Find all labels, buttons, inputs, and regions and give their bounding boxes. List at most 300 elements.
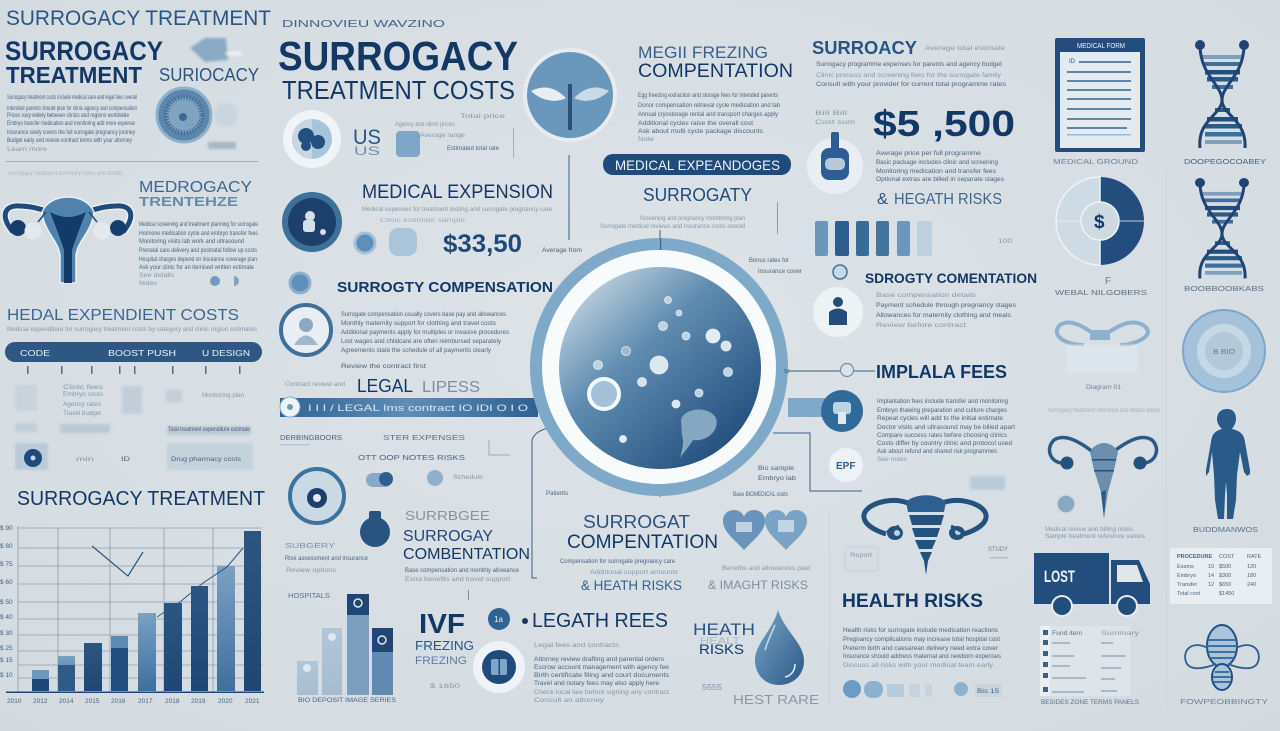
text block: medrogacy paragraph: Prenatal care delivery and postnatal follow up costs <box>139 248 257 254</box>
axis labels: cost values: $ 40 <box>0 614 13 621</box>
axis labels: years <box>7 698 260 705</box>
heading: surrogacy treatment chart title: SURROGACY TREATMENT <box>17 488 265 510</box>
icon: uterus anatomy <box>5 197 131 283</box>
icon: numbered ring on timeline <box>840 364 854 376</box>
text block: health risks paragraph: Preterm birth and caesarean delivery need extra cover <box>843 646 998 652</box>
text block: surrogaty caption: Surrogate medical reviews and insurance costs overall <box>600 224 745 230</box>
table: cost breakdown: Clinic fees <box>63 385 103 391</box>
table: white data card: 10 <box>1208 564 1214 570</box>
heading: legal fees <box>285 376 480 396</box>
table: cost breakdown <box>15 385 253 470</box>
text: DNA flower caption: FOWPEOBBINGTY <box>1180 697 1268 706</box>
table: cost breakdown: Drug pharmacy costs <box>171 457 241 463</box>
table: cost breakdown: Embryo costs <box>63 392 103 398</box>
text block: freezing paragraph: Egg freezing extraction and storage fees for intended parents <box>638 93 778 99</box>
text block: implant fees paragraph: Implantation fees include transfer and monitoring <box>877 399 1008 405</box>
text: callouts around disc: Embryo lab <box>758 476 797 482</box>
text block: US notes <box>395 114 506 152</box>
text: best rate: HEST RARE <box>733 692 819 707</box>
text block: freezing paragraph: Note <box>638 137 655 143</box>
text block: intro paragraph: Budget early and review contract terms with your attorney <box>7 138 132 144</box>
text: small note after toggles: Schedule <box>453 475 484 481</box>
heading: surrogacy compensation right: SDROGTY COMENTATION <box>865 270 1037 286</box>
text block: intro paragraph <box>7 95 137 153</box>
text: uterus caption: Sample treatment reference values <box>1045 534 1145 540</box>
heading: surrogacy compensation lower <box>403 508 530 563</box>
icon: egg cell <box>157 88 238 149</box>
label pill: cost categories: BOOST PUSH <box>108 349 176 358</box>
icon: freezing circle <box>473 641 525 693</box>
heading: surrogacy compensation lower: SURRBGEE <box>405 508 490 523</box>
heading: implant fees: IMPLALA FEES <box>876 362 1007 382</box>
text: callouts around disc: Patients <box>546 491 568 497</box>
text block: medical expense caption: Medical expenses for treatment testing and surrogate pregnancy care <box>362 207 553 213</box>
table: white data card: 12 <box>1208 582 1214 588</box>
panel: lower centre compensation <box>560 510 819 707</box>
heading: legal fees: LIPESS <box>422 379 480 396</box>
chart: pie with dollar <box>1056 177 1144 265</box>
heading: megi freezing: MEGII FREZING <box>638 43 768 62</box>
text: pale uterus caption: Diagram 01 <box>1086 384 1121 391</box>
text block: medical expense caption: Clinic estimate sample <box>380 218 466 224</box>
heading: surrogaty: SURROGATY <box>643 185 752 205</box>
icon: small blue capsule <box>210 276 239 286</box>
axis labels: years: 2012 <box>33 698 48 705</box>
table: white data card: $1450 <box>1219 591 1234 597</box>
text block: US notes: Average range <box>420 133 466 139</box>
text block: compensation paragraph: Review the contract first <box>341 364 426 370</box>
text block: intro paragraph: Prices vary widely between clinics and regions worldwide <box>7 113 130 119</box>
table: cost breakdown: Agency rates <box>63 402 101 408</box>
text block: compensation paragraph: Surrogate compensation usually covers base pay and allowances <box>341 312 506 318</box>
text block: US notes: Total price <box>460 114 506 120</box>
text block: medical expense caption <box>362 207 553 224</box>
text: faded US label: US <box>354 144 380 158</box>
panel: centre title and costs <box>278 19 670 704</box>
text block: legal fees paragraph: Escrow account management with agency fee <box>534 665 670 671</box>
text block: legal fees paragraph: Birth certificate filing and court documents <box>534 673 669 679</box>
text: small note beside price <box>815 111 855 126</box>
text block: legal fees paragraph: Attorney review drafting and parental orders <box>534 657 664 663</box>
title: surrogacy: SURROGACY <box>278 33 518 79</box>
large cell <box>589 379 619 409</box>
panel: top centre-right <box>600 38 1037 705</box>
axis labels: cost values: $ 60 <box>0 579 13 586</box>
axis labels: years: 2021 <box>245 698 260 705</box>
axis labels: cost values: $ 90 <box>0 525 13 532</box>
heading: health risks: & <box>877 191 888 208</box>
icon: blurred blue badge <box>190 38 242 62</box>
text block: implant fees paragraph: Ask about refund and shared risk programmes <box>877 449 997 455</box>
heading: surrogacy compensation lower: SURROGAY <box>403 528 493 545</box>
text: small IVF note: $ 1650 <box>430 684 461 690</box>
text block: intro paragraph: Surrogacy treatment costs include medical care and legal fees overall <box>7 95 137 101</box>
text block: implant fees paragraph: Costs differ by country clinic and protocol used <box>877 441 1012 447</box>
heading: health risks centre: & HEATH RISKS <box>581 577 682 593</box>
axis labels: cost values: $ 15 <box>0 657 13 664</box>
heading: treatment bold: TREATMENT <box>6 62 142 88</box>
timeline bar: legal <box>280 397 538 417</box>
table: white data card: PROCEDURE <box>1177 554 1212 560</box>
icon: uterus simplified <box>864 495 986 575</box>
text block: implant fees paragraph <box>877 399 1015 463</box>
icon: dark medical circle <box>282 192 342 252</box>
title: treatment costs: TREATMENT COSTS <box>282 75 515 105</box>
text block: freezing paragraph <box>638 93 781 143</box>
icon: flask <box>360 511 390 547</box>
axis labels: cost values: $ 25 <box>0 645 13 652</box>
text block: compensation right <box>876 293 1016 329</box>
icon: water drop <box>755 610 804 685</box>
icon: pale device <box>389 228 417 256</box>
text block: medrogacy paragraph: Hormone medication cycle and embryo transfer fees <box>139 231 258 237</box>
text block: compensation lines: Additional support amounts <box>590 570 678 576</box>
chart: pie with dollar: $ <box>1094 212 1105 233</box>
heading: surrogacy compensation lower: COMBENTATION <box>403 546 530 563</box>
heading: medical expense: MEDICAL EXPENSION <box>362 182 553 203</box>
icon: implant head circle <box>821 390 863 432</box>
text block: surroacy lines: Clinic process and screening fees for the surrogate family <box>816 73 1001 79</box>
text block: implant fees paragraph: Embryo thawing preparation and culture charges <box>877 408 1007 414</box>
table: white data card: 180 <box>1247 573 1256 579</box>
text block: compensation lines: Compensation for surrogate pregnancy care <box>560 559 676 565</box>
number: medical cost: $33,50 <box>443 230 522 258</box>
text: long faint line: Surrogacy treatment reference and details below <box>1048 408 1161 414</box>
text block: price paragraph <box>876 151 1004 183</box>
icon: DNA helix lower <box>1195 178 1249 278</box>
heading: health risks stacked: RISKS <box>699 641 744 657</box>
text block: intro paragraph: Embryo transfer medication and monitoring add more expense <box>7 121 136 127</box>
text: IVF heading: IVF <box>419 608 465 639</box>
text block: health risks paragraph <box>843 628 1001 669</box>
icon: pale ring <box>1183 310 1265 392</box>
text block: health risks paragraph: Pregnancy complications may increase total hospital cost <box>843 637 1000 643</box>
icon: pale block <box>970 476 1005 490</box>
text block: implant fees paragraph: Compare success rates before choosing clinics <box>877 433 1007 439</box>
heading: compensation: COMPENTATION <box>638 61 793 82</box>
text: kicker above title: DINNOVIEU WAVZINO <box>282 19 445 30</box>
subheading: suriocacy: SURIOCACY <box>159 65 259 85</box>
text block: price paragraph: Optional extras are billed in separate stages <box>876 177 1004 183</box>
icon: person circle <box>813 287 863 337</box>
heading: legal fees: Contract review and <box>285 382 345 388</box>
central illustration: petri dish with cells: $0 <box>784 369 790 375</box>
table: cost breakdown: Total treatment expenditure estimate <box>168 427 251 433</box>
heading: surroacy: SURROACY <box>812 38 917 58</box>
text block: medrogacy paragraph: Medical screening and treatment planning for surrogate <box>139 222 259 228</box>
text: small note beside price: Bill Bill <box>815 111 847 117</box>
icon: pale note box: Report <box>850 553 872 559</box>
table: white data card: Transfer <box>1177 582 1197 588</box>
label pill: cost categories <box>5 342 262 362</box>
small bar chart: IVF stages <box>297 594 396 704</box>
text block: compensation right: Payment schedule through pregnancy stages <box>876 303 1016 309</box>
icon: DNA flower <box>1185 625 1259 690</box>
text: caption under costs heading: Medical expenditure for surrogacy treatment costs by category and clinic region estimates <box>7 327 257 333</box>
icon: two hearts <box>723 510 807 550</box>
text block: compensation lower lines: Extra benefits and travel support <box>405 577 510 583</box>
text block: surrogaty caption <box>600 202 778 234</box>
text block: surrogaty caption: Screening and pregnancy monitoring plan <box>640 216 745 222</box>
table: white data card: COST <box>1219 554 1235 560</box>
icon: medical document: MEDICAL FORM <box>1077 43 1125 50</box>
heading: surrogacy bold: SURROGACY <box>5 36 163 66</box>
text block: left-lower notes <box>285 543 369 600</box>
connector bar: to implant fees <box>788 398 828 417</box>
axis labels: years: 2017 <box>138 698 153 705</box>
text block: surroacy lines: Average total estimate <box>925 46 1006 52</box>
icon: pale note box <box>845 547 878 571</box>
text block: compensation right: Review before contract <box>876 323 966 329</box>
text block: freezing paragraph: Additional cycles raise the overall cost <box>638 121 753 127</box>
heading: health risks stacked <box>693 620 755 657</box>
text block: compensation right: Base compensation details <box>876 293 976 299</box>
text block: price paragraph: Basic package includes clinic and screening <box>876 160 998 166</box>
axis labels: cost values: $ 30 <box>0 630 13 637</box>
heading: medical expenditure costs: HEDAL EXPENDIENT COSTS <box>7 307 239 324</box>
axis labels: cost values: $ 80 <box>0 543 13 550</box>
text block: left-lower notes: Review options <box>286 568 336 574</box>
small bar chart: IVF stages: BIO DEPOSIT IMAGE SERIES <box>298 698 396 704</box>
icon: uterus right column <box>1049 438 1157 518</box>
axis labels: cost values: $ 10 <box>0 672 13 679</box>
icon: legal target ring <box>290 469 344 523</box>
heading: compensation centre: COMPENTATION <box>567 532 718 553</box>
text: small note beside price: Cost sum <box>815 120 855 126</box>
icon: numbered badge: 1a <box>494 615 503 624</box>
axis labels: years: 2015 <box>85 698 100 705</box>
text: silhouette caption: BUDDMANWOS <box>1193 525 1258 534</box>
cells <box>594 296 732 442</box>
text block: legal labels: OTT OOP NOTES RISKS <box>358 455 465 462</box>
label pill: cost categories: CODE <box>20 349 50 358</box>
text block: legal labels: STER EXPENSES <box>383 435 465 442</box>
text block: health risks paragraph: Discuss all risks with your medical team early <box>843 663 993 669</box>
text: uterus caption: Medical review and billing notes <box>1045 527 1133 533</box>
text block: compensation paragraph: Additional payments apply for multiples or invasive procedures <box>341 330 509 336</box>
icon: compensation mini ring <box>833 265 847 279</box>
text block: legal labels <box>280 435 510 462</box>
list: checklist: Fund item <box>1052 631 1082 637</box>
text block: medrogacy paragraph: Hospital charges depend on insurance coverage plan <box>139 257 257 263</box>
table: white data card: $300 <box>1219 573 1231 579</box>
axis labels: cost values: $ 50 <box>0 599 13 606</box>
text: uterus caption <box>1045 527 1145 540</box>
axis labels: years: 2018 <box>165 698 180 705</box>
text: pie caption: F <box>1105 276 1111 287</box>
icon: pale ring: B BIO <box>1213 349 1236 356</box>
text block: legal fees paragraph: Travel and notary fees may also apply here <box>534 681 660 687</box>
heading: health risks faded: & IMAGHT RISKS <box>708 578 808 592</box>
text: note at right of uterus: STUDY <box>988 547 1008 553</box>
text block: compensation lines: Benefits and allowances paid <box>722 566 810 572</box>
text block: medrogacy paragraph <box>139 222 259 287</box>
table: white data card: 240 <box>1247 582 1256 588</box>
table: white data card: Embryo <box>1177 573 1196 579</box>
text: note at right of uterus <box>988 547 1008 558</box>
axis labels: cost values <box>0 525 13 679</box>
text block: intro paragraph: Intended parents should plan for clinic agency and compensation <box>7 106 137 112</box>
icon: medical wings circle <box>525 50 615 140</box>
icon: lost truck: LOST <box>1044 567 1075 586</box>
number: main cost: $5 ,500 <box>873 103 1015 144</box>
text block: compensation paragraph: Lost wages and childcare are often reimbursed separately <box>341 339 501 345</box>
text block: implant fees paragraph: Repeat cycles will add to the initial estimate <box>877 416 1004 422</box>
text block: left-lower notes: HOSPITALS <box>288 593 330 600</box>
heading: health risks: HEGATH RISKS <box>894 191 1002 208</box>
table: cost breakdown: min <box>76 457 94 463</box>
text block: compensation right: Allowances for maternity clothing and meals <box>876 313 1011 319</box>
text block: surroacy lines: Surrogacy programme expenses for parents and agency budget <box>816 62 1002 68</box>
text: US label: US <box>353 126 381 149</box>
text block: price paragraph: Average price per full programme <box>876 151 982 157</box>
heading: trenthenze: TRENTEHZE <box>139 194 238 209</box>
axis labels: years: 2019 <box>191 698 206 705</box>
table: white data card <box>1170 548 1272 604</box>
table: white data card: $650 <box>1219 582 1231 588</box>
text block: compensation paragraph: Monthly maternity support for clothing and travel costs <box>341 321 496 327</box>
icon: medical document <box>1055 38 1145 152</box>
heading: legal fees lower: LEGATH REES <box>532 610 668 632</box>
text block: compensation lines <box>560 559 810 576</box>
panel: left column overview <box>0 7 271 705</box>
heading: health risks stacked: HEATH <box>693 620 755 639</box>
heading: legal fees: LEGAL <box>357 376 413 396</box>
text block: legal fees paragraph: Check local law before signing any contract <box>534 690 669 696</box>
icon row: health stats: Bis 15 <box>977 689 1000 695</box>
heading: medrogacy: MEDROGACY <box>139 179 252 196</box>
axis labels: years: 2010 <box>7 698 22 705</box>
icon: rounded square <box>396 131 420 157</box>
text block: freezing paragraph: Donor compensation retrieval cycle medication and lab <box>638 103 781 109</box>
text: document caption: MEDICAL GROUND <box>1053 157 1139 166</box>
text block: legal fees paragraph <box>534 643 670 704</box>
axis labels: years: 2014 <box>59 698 74 705</box>
text block: legal fees paragraph: Legal fees and contracts <box>534 643 619 649</box>
table: cost breakdown: Monitoring plan <box>202 393 244 399</box>
text block: compensation lower lines: Base compensation and monthly allowance <box>405 568 520 574</box>
heading: surrogate: SURROGAT <box>583 512 690 532</box>
icon: pale uterus diagram <box>1057 322 1148 373</box>
icon: small blue ring <box>355 233 375 253</box>
text: freezing faded: FREZING <box>415 655 467 667</box>
text block: freezing paragraph: Ask about multi cycle package discounts <box>638 129 763 135</box>
text block: US notes: Agency and clinic prices <box>395 122 455 128</box>
axis labels: years: 2016 <box>111 698 126 705</box>
text block: compensation lower lines <box>405 568 520 583</box>
text block: intro paragraph: Learn more <box>7 147 48 153</box>
text: callouts around disc <box>542 248 802 498</box>
text: pie caption: WEBAL NILGOBERS <box>1055 288 1147 297</box>
text block: legal fees paragraph: Consult an attorney <box>534 698 604 704</box>
table: white data card: RATE <box>1247 554 1262 560</box>
table: cost breakdown: ID <box>121 457 131 463</box>
text: freezing: FREZING <box>415 638 474 653</box>
table: white data card: 14 <box>1208 573 1214 579</box>
icons: small pale toggles <box>366 470 443 487</box>
list: checklist <box>1040 626 1139 696</box>
text: callouts around disc: Bonus rates for <box>749 258 789 264</box>
timeline bar: legal: I I I / LEGAL Ims contract IO IDI O I O <box>308 403 528 413</box>
icon: compensation badge <box>290 273 310 293</box>
icon: numbered white circle <box>829 448 863 482</box>
text block: intro paragraph: Insurance rarely covers the full surrogate pregnancy journey <box>7 130 135 136</box>
icon: numbered badge <box>488 608 510 630</box>
bar row: risk levels <box>793 221 1013 256</box>
label pill: cost categories: U DESIGN <box>202 349 250 358</box>
text block: compensation paragraph: Agreements state the schedule of all payments clearly <box>341 348 491 354</box>
text block: legal labels: DERBINGBOORS <box>280 435 342 442</box>
icon: lost truck <box>1034 553 1150 617</box>
nucleus blob <box>680 410 717 458</box>
text block: price paragraph: Monitoring medication and transfer fees <box>876 169 996 175</box>
text block: surroacy lines: Consult with your provider for current total programme rates <box>816 82 1006 88</box>
icon: medical bottle <box>807 132 863 194</box>
text block: left-lower notes: Risk assessment and insurance <box>285 556 369 562</box>
table: cost breakdown: Travel budget <box>63 411 101 417</box>
text: callouts around disc: Average from <box>542 248 582 254</box>
axis labels: cost values: $ 75 <box>0 561 13 568</box>
heading: surrogacy treatment: SURROGACY TREATMENT <box>6 7 271 30</box>
connector lines around central disc <box>532 155 875 578</box>
text block: freezing paragraph: Annual cryostorage rental and transport charges apply <box>638 112 778 118</box>
text block: health risks paragraph: Health risks for surrogate include medication reactions <box>843 628 998 634</box>
text: callouts around disc: Insurance cover <box>758 269 802 275</box>
icon: DNA helix top <box>1195 40 1249 148</box>
table: white data card: Exams <box>1177 564 1194 570</box>
heading: surrogacy compensation: SURROGTY COMPENSATION <box>337 279 553 296</box>
icon row: health stats <box>843 680 1002 698</box>
panel: right icon column <box>1034 38 1272 710</box>
text: callouts around disc: Bio sample <box>758 466 795 472</box>
text: pie caption <box>1055 276 1147 297</box>
heading: health risks stacked: HEALT <box>700 636 740 647</box>
text block: left-lower notes: SUBGERY <box>285 543 335 550</box>
bar row: risk levels: 100 <box>998 239 1013 245</box>
text block: medrogacy paragraph: Ask your clinic for an itemised written estimate <box>139 265 255 271</box>
label pill: medical expenditures: MEDICAL EXPEANDOGES <box>615 157 780 173</box>
text: checklist caption: BESIDES ZONE TERMS PANELS <box>1041 699 1140 706</box>
icon: compensation portrait <box>281 305 331 355</box>
axis labels: years: 2020 <box>218 698 233 705</box>
text: callouts around disc: Base BIOMEDICAL costs <box>733 492 788 498</box>
table: white data card: 120 <box>1247 564 1256 570</box>
table: white data card: $500 <box>1219 564 1231 570</box>
text: DNA caption lower: BOOBBOOBKABS <box>1184 284 1264 293</box>
list: checklist: Summary <box>1101 631 1139 637</box>
icon: numbered white circle: EPF <box>836 461 855 472</box>
icon: medical document: ID <box>1069 59 1076 65</box>
icon: female silhouette <box>1206 409 1250 519</box>
icon: donut with hands <box>283 110 341 168</box>
text block: US notes: Estimated total rate <box>447 146 500 152</box>
text block: compensation paragraph <box>341 312 509 370</box>
text block: implant fees paragraph: See notes <box>877 457 907 463</box>
bar chart: cost trend <box>0 525 264 705</box>
table: white data card: Total cost <box>1177 591 1201 597</box>
heading: health risks main: HEALTH RISKS <box>842 591 983 612</box>
text: small value: 5555 <box>702 683 723 692</box>
text block: medrogacy paragraph: Monitoring visits lab work and ultrasound <box>139 239 244 245</box>
text block: medrogacy paragraph: Notes <box>139 281 157 287</box>
central illustration: petri dish with cells <box>530 238 790 496</box>
text block: health risks paragraph: Insurance should address maternal and newborn expenses <box>843 654 1001 660</box>
text block: implant fees paragraph: Doctor visits and ultrasound may be billed apart <box>877 425 1015 431</box>
text block: surroacy lines <box>816 46 1006 88</box>
text: DNA caption top: DOOPEGOCOABEY <box>1184 157 1266 166</box>
text block: medrogacy paragraph: See details <box>139 273 174 279</box>
text: faint caption line: Surrogacy treatment summary notes and details <box>8 171 123 177</box>
